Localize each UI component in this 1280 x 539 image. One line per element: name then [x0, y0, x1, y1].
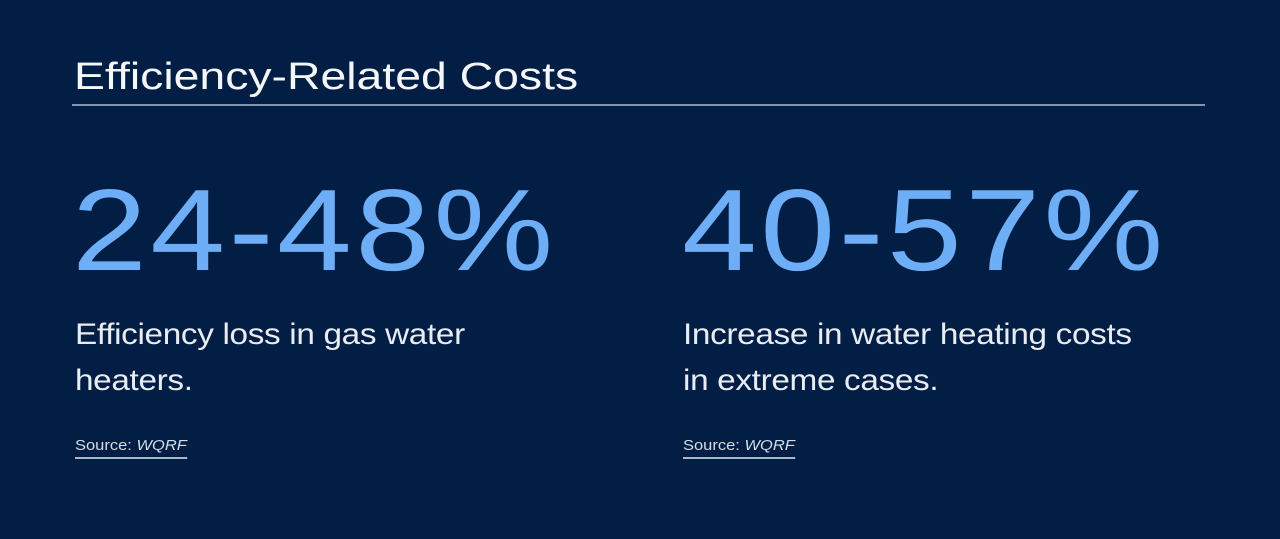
description: Increase in water heating costs: [683, 318, 1132, 351]
description: heaters.: [75, 364, 193, 397]
description: [75, 318, 465, 397]
description: Efficiency loss in gas water: [75, 318, 465, 351]
panel: heating costs: [682, 165, 1167, 459]
description: in extreme cases.: [683, 364, 938, 397]
source: Source: WQRF: [683, 437, 795, 454]
description: [683, 318, 1132, 397]
panel: gas water heaters: [72, 165, 557, 459]
big number: 40-57%: 40-57%: [682, 165, 1167, 295]
big number: 24-48%: 24-48%: [72, 165, 557, 295]
title: Efficiency-Related Costs: [74, 56, 578, 98]
source: Source: WQRF: [75, 437, 187, 454]
